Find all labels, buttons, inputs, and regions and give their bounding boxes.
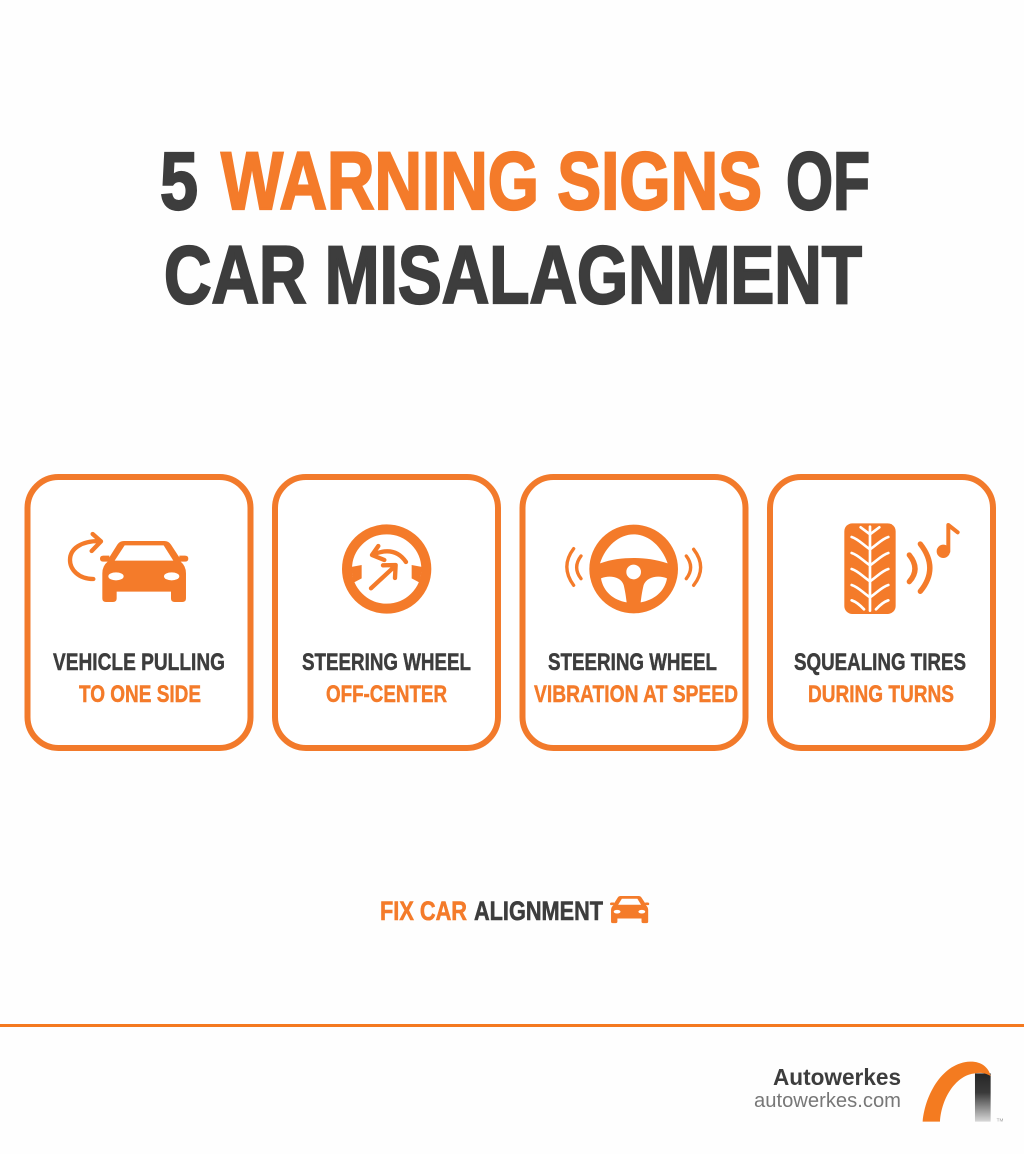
title: OF [786, 136, 870, 227]
icon: tire tread with sound waves and music note [844, 523, 958, 614]
icon: off-center steering wheel [347, 529, 426, 609]
title: CAR MISALAGNMENT [164, 230, 862, 321]
call to action: fix car alignment: FIX CAR [380, 896, 467, 926]
icon: car with curved arrow [70, 534, 188, 602]
footer brand text: autowerkes.com [754, 1090, 901, 1112]
panel: squealing tires during turns [770, 477, 993, 748]
label: vehicle pulling to one side: VEHICLE PULLING [53, 649, 225, 676]
call to action: fix car alignment: ALIGNMENT [474, 896, 603, 926]
label: steering wheel off-center: STEERING WHEEL [302, 649, 471, 676]
label: steering wheel vibration at speed: VIBRATION AT SPEED [534, 681, 738, 708]
label: steering wheel vibration at speed [534, 649, 738, 708]
label: steering wheel vibration at speed: STEERING WHEEL [548, 649, 717, 676]
label: squealing tires during turns: SQUEALING TIRES [794, 649, 966, 676]
label: vehicle pulling to one side [53, 649, 225, 708]
panel: steering wheel vibration at speed [522, 477, 746, 748]
logo: orange arch: TM [997, 1117, 1003, 1122]
logo: orange arch [923, 1062, 1003, 1122]
call to action: fix car alignment [380, 896, 649, 926]
icon: vibrating steering wheel [567, 525, 701, 613]
label: vehicle pulling to one side: TO ONE SIDE [79, 681, 201, 708]
title: 5 [160, 136, 198, 227]
label: steering wheel off-center [302, 649, 471, 708]
panel: vehicle pulling to one side [28, 477, 250, 748]
footer brand text [754, 1064, 901, 1112]
footer brand text: Autowerkes [773, 1064, 901, 1090]
icon: small car [610, 896, 649, 923]
label: squealing tires during turns: DURING TURNS [808, 681, 954, 708]
title [160, 136, 870, 321]
label: squealing tires during turns [794, 649, 966, 708]
panel: steering wheel off-center [275, 477, 498, 748]
title: WARNING SIGNS [221, 136, 762, 227]
label: steering wheel off-center: OFF-CENTER [326, 681, 447, 708]
